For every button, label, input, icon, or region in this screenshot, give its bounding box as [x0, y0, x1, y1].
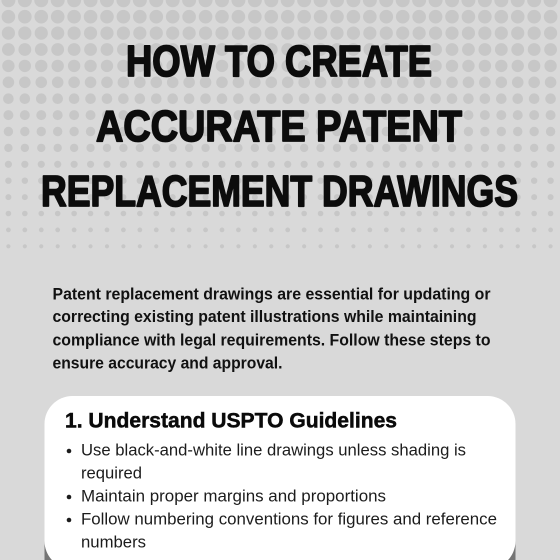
intro paragraph: correcting existing patent illustrations while maintaining	[52, 307, 476, 326]
intro paragraph: compliance with legal requirements. Follow these steps to	[52, 330, 490, 350]
card heading: 1. Understand USPTO Guidelines	[65, 408, 397, 432]
intro paragraph: Patent replacement drawings are essential for updating or	[52, 284, 491, 303]
title: ACCURATE PATENT	[96, 102, 462, 151]
card shadow	[44, 414, 516, 560]
title	[41, 37, 518, 216]
bullet list: numbers	[81, 532, 146, 552]
bullet list: Follow numbering conventions for figures and reference	[81, 510, 497, 528]
bullet list: Use black-and-white line drawings unless shading is	[81, 440, 466, 460]
bullet list: Maintain proper margins and proportions	[81, 486, 386, 506]
card body	[44, 396, 516, 560]
panel: step 1 card	[44, 396, 516, 560]
bullet list: required	[81, 464, 142, 482]
title: HOW TO CREATE	[126, 37, 432, 86]
bullet list	[67, 440, 497, 552]
intro paragraph	[52, 284, 491, 373]
intro paragraph: ensure accuracy and approval.	[52, 354, 282, 373]
